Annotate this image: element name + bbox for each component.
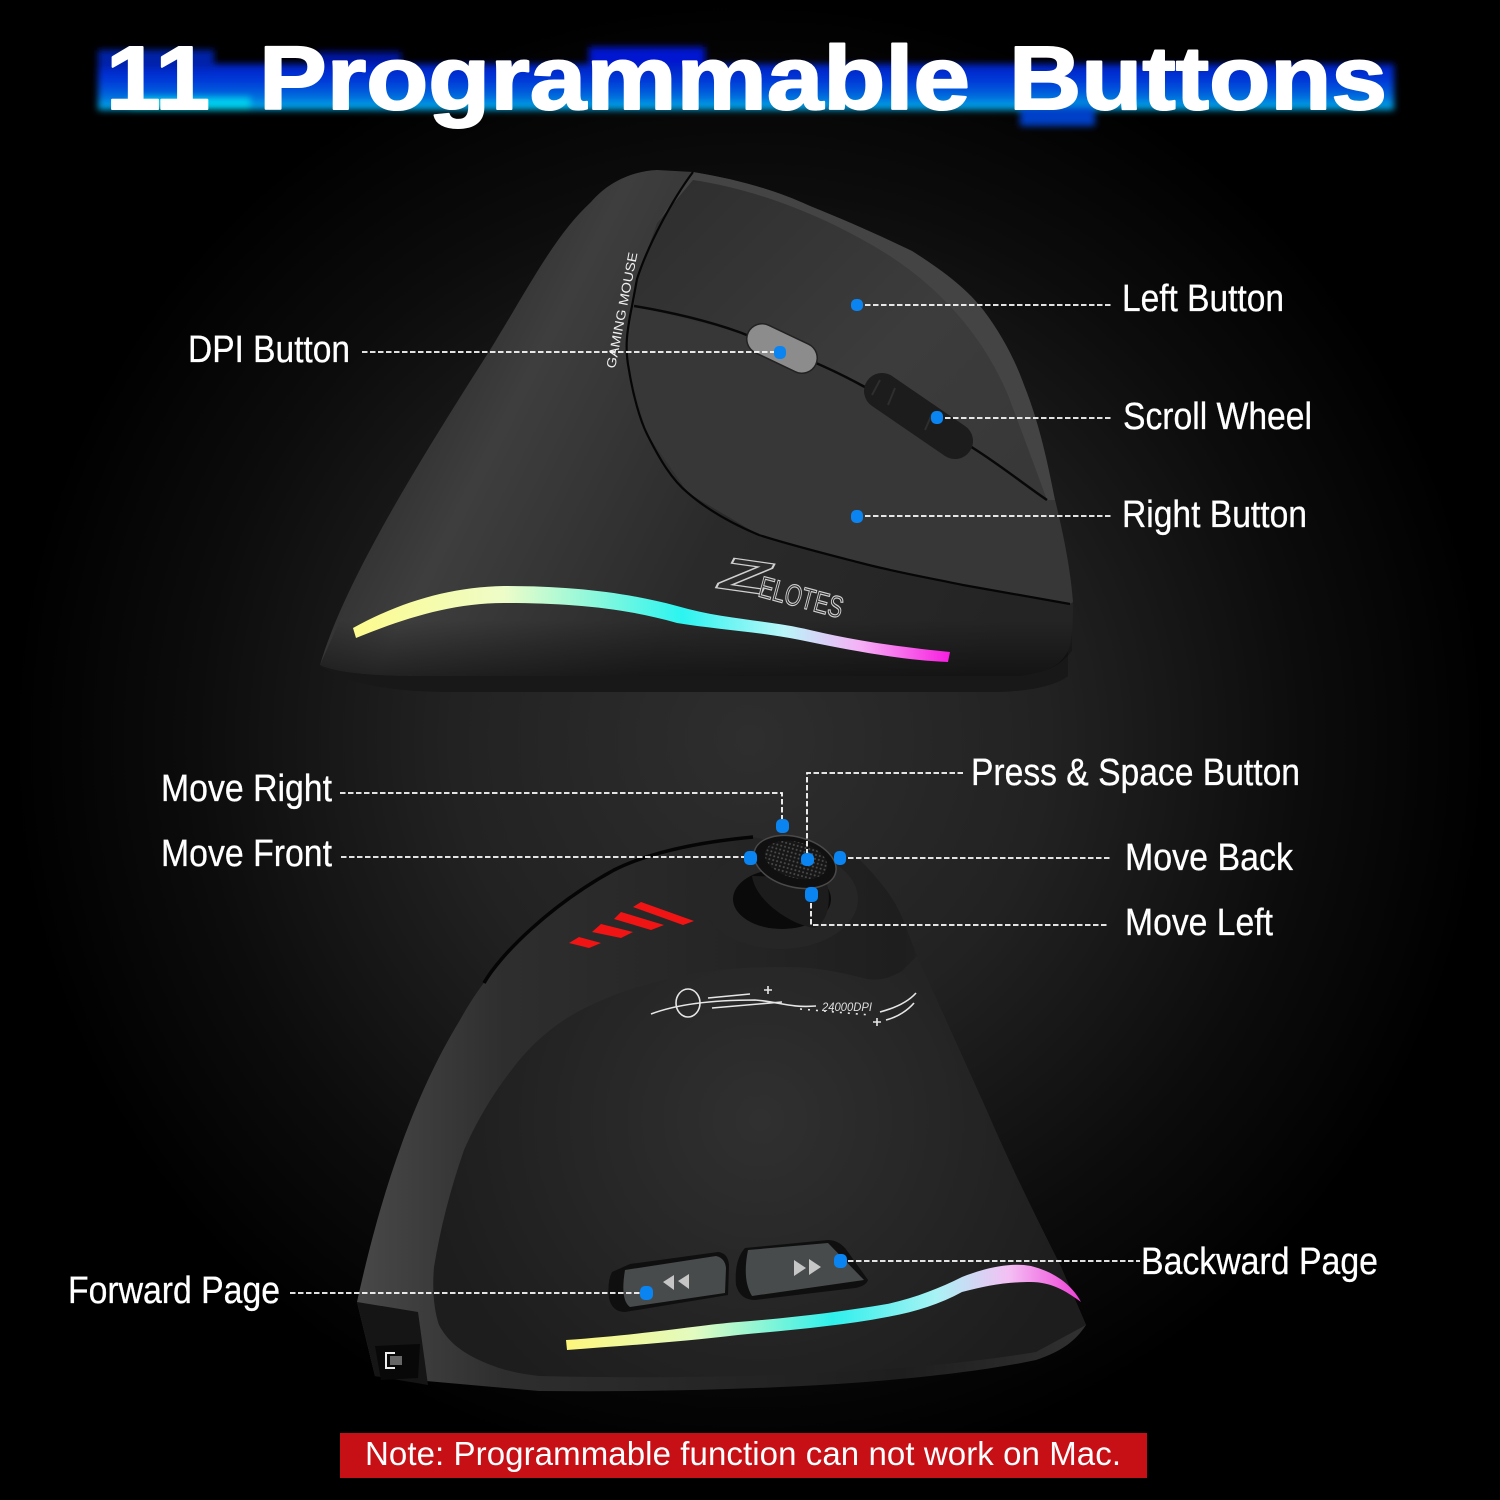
label: move right: Move Right <box>161 768 332 810</box>
note text: Note: Programmable function can not work on Mac. <box>365 1435 1121 1472</box>
mouse body <box>357 837 1086 1391</box>
bottom shade <box>320 620 1072 676</box>
scroll wheel <box>872 380 955 441</box>
title word: Programmable: Programmable <box>259 29 970 129</box>
rgb light strip <box>353 586 950 662</box>
joystick stem <box>752 876 829 928</box>
bottom mouse: rear view <box>357 827 1086 1391</box>
title word: 11: 11 <box>106 29 210 129</box>
rear outer edge <box>484 837 753 983</box>
title word: Buttons: Buttons <box>1009 29 1387 129</box>
left button panel <box>634 180 1047 500</box>
mouse shadow base <box>320 640 1068 692</box>
callout leader lines <box>290 305 1140 1293</box>
gaming mouse text: GAMING MOUSE <box>603 251 641 370</box>
title blue glow band <box>98 47 1394 126</box>
logo letters: ELOTES <box>755 571 847 625</box>
dpi label: 24000DPI <box>821 1002 873 1014</box>
label: right button: Right Button <box>1122 494 1307 536</box>
zelotes logo <box>713 546 847 625</box>
label: move back: Move Back <box>1125 837 1294 879</box>
note banner <box>340 1433 1147 1478</box>
usb port <box>375 1344 420 1380</box>
callout labels <box>68 278 1378 1312</box>
label: forward page: Forward Page <box>68 1270 280 1312</box>
DPI button <box>762 339 802 358</box>
left button rim <box>634 172 1055 500</box>
joystick well <box>733 869 831 929</box>
label: move front: Move Front <box>161 833 332 875</box>
usb port panel <box>357 1302 428 1385</box>
inner rear panel <box>433 956 1086 1377</box>
top mouse: side view <box>320 170 1073 692</box>
rgb light strip <box>566 1265 1081 1350</box>
mouse body <box>320 170 1073 676</box>
joystick texture <box>760 834 832 886</box>
title <box>98 29 1394 129</box>
dpi diagram <box>651 986 916 1026</box>
joystick cap <box>748 827 842 897</box>
button seams <box>627 172 1070 604</box>
backward page button <box>736 1240 868 1300</box>
logo letter Z: Z <box>713 546 777 605</box>
title text <box>106 29 1387 129</box>
label: left button: Left Button <box>1122 278 1284 320</box>
forward page button <box>608 1252 729 1312</box>
callout dots <box>640 299 943 1300</box>
label: backward page: Backward Page <box>1141 1241 1378 1283</box>
right button panel <box>629 306 1073 604</box>
note background <box>340 1433 1147 1478</box>
label: dpi button: DPI Button <box>188 329 350 371</box>
joystick base <box>702 849 858 949</box>
label: move left: Move Left <box>1125 902 1273 944</box>
label: scroll wheel: Scroll Wheel <box>1123 396 1312 438</box>
label: press and space button: Press & Space Button <box>971 752 1300 794</box>
red dpi indicators <box>569 902 694 948</box>
